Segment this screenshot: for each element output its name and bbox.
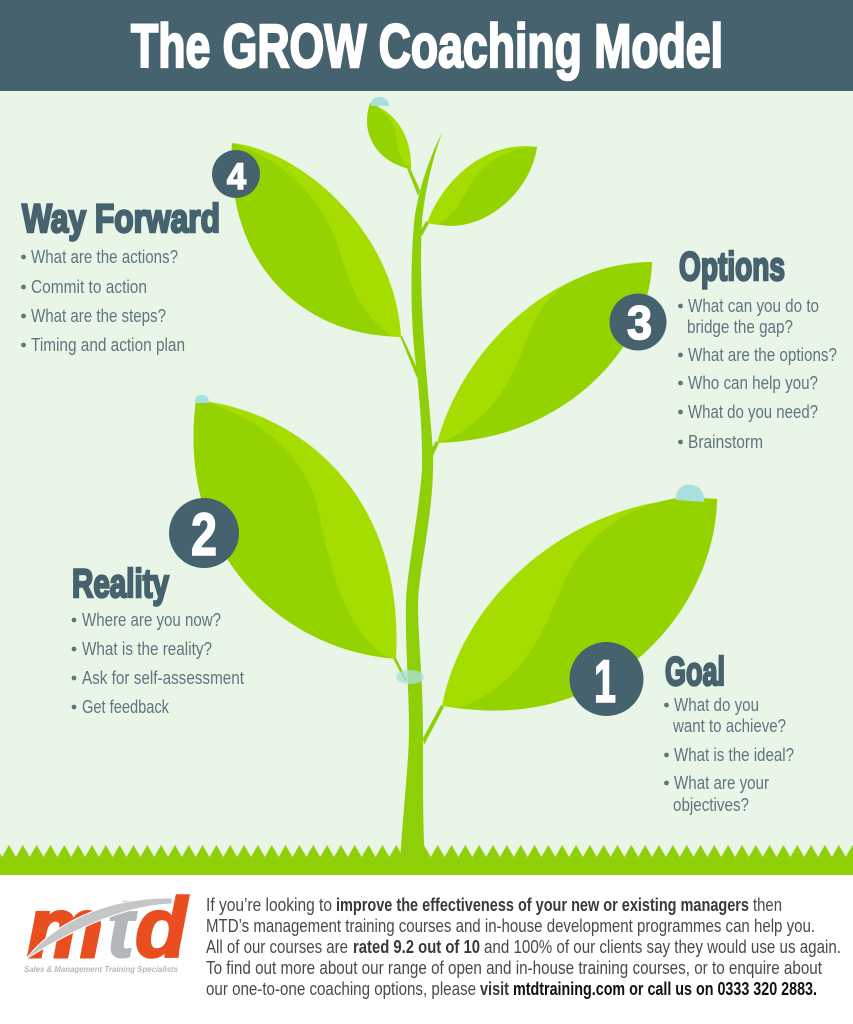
logo: mtd: d [135, 881, 189, 975]
list: goal: What do you [674, 695, 759, 715]
panel: options [678, 245, 837, 452]
footer text: If you’re looking to [206, 895, 332, 915]
footer text: visit [480, 979, 509, 999]
panel: way forward [21, 197, 220, 355]
number circle 2 [169, 498, 239, 568]
list: goal [664, 695, 794, 815]
branch: leaf 2 [393, 658, 407, 682]
logo: mtd [24, 881, 189, 975]
list: options: bridge the gap? [687, 317, 793, 337]
branch: leaf 3 [431, 441, 439, 456]
heading: reality: Reality [72, 562, 170, 606]
branch: top left leaf [407, 168, 420, 196]
list: way forward: What are the actions? [31, 247, 178, 267]
leaf 4 [232, 143, 401, 337]
list: reality [72, 610, 244, 717]
footer text [206, 895, 841, 999]
number circle 2: 2 [191, 501, 217, 568]
leaf: top left [367, 103, 411, 169]
grass [0, 845, 853, 875]
list: reality: What is the reality? [82, 639, 212, 659]
list: way forward: Commit to action [31, 277, 147, 297]
list: goal: What are your [674, 773, 769, 793]
list: goal: want to achieve? [672, 716, 786, 736]
leaf 3 [437, 262, 652, 443]
branch: leaf 1 [423, 705, 444, 745]
list: way forward: What are the steps? [31, 306, 166, 326]
number circle 1 [570, 642, 644, 716]
list: options [678, 296, 837, 452]
drop on leaf 2 [195, 395, 209, 403]
plant stem [393, 133, 444, 862]
leaf 1 [442, 497, 717, 711]
water drops [195, 97, 704, 684]
list: goal: What is the ideal? [674, 745, 794, 765]
list: way forward: Timing and action plan [31, 335, 185, 355]
heading: options: Options [679, 245, 785, 289]
header banner [0, 0, 853, 91]
drop on leaf 1 [676, 484, 704, 502]
panel: reality [72, 562, 244, 717]
list: reality: Get feedback [82, 697, 170, 717]
list: way forward [21, 247, 185, 355]
number circle 4 [212, 150, 260, 198]
list: reality: Where are you now? [82, 610, 221, 630]
footer text: All of our courses are [206, 937, 348, 957]
list: goal: objectives? [673, 795, 749, 815]
list: options: What do you need? [688, 402, 818, 422]
footer text: improve the effectiveness of your new or existing managers [336, 895, 749, 915]
branch: leaf 4 [400, 336, 417, 378]
leaf: top right [427, 146, 537, 226]
background panel [0, 91, 853, 875]
footer text: rated 9.2 out of 10 [353, 937, 480, 957]
panel: goal [664, 650, 794, 815]
logo: mtd: t [107, 881, 137, 975]
footer text: our one-to-one coaching options, please [206, 979, 476, 999]
list: options: Brainstorm [688, 432, 763, 452]
list: options: Who can help you? [688, 373, 818, 393]
number circle 1: 1 [594, 648, 616, 715]
number circle 4: 4 [227, 156, 246, 197]
heading: goal: Goal [665, 650, 725, 694]
list: options: What can you do to [688, 296, 819, 316]
logo: mtd: m [27, 881, 103, 975]
number circle 3: 3 [627, 296, 652, 349]
heading: way forward: Way Forward [22, 197, 220, 241]
footer text: then [753, 895, 782, 915]
logo tagline: Sales & Management Training Specialists [24, 964, 178, 974]
list: reality: Ask for self-assessment [82, 668, 244, 688]
leaf 2 [193, 400, 397, 659]
logo swoosh [26, 898, 172, 959]
number circle 3 [610, 294, 666, 350]
drop on stem [396, 670, 424, 684]
branch: top right leaf [420, 221, 429, 236]
